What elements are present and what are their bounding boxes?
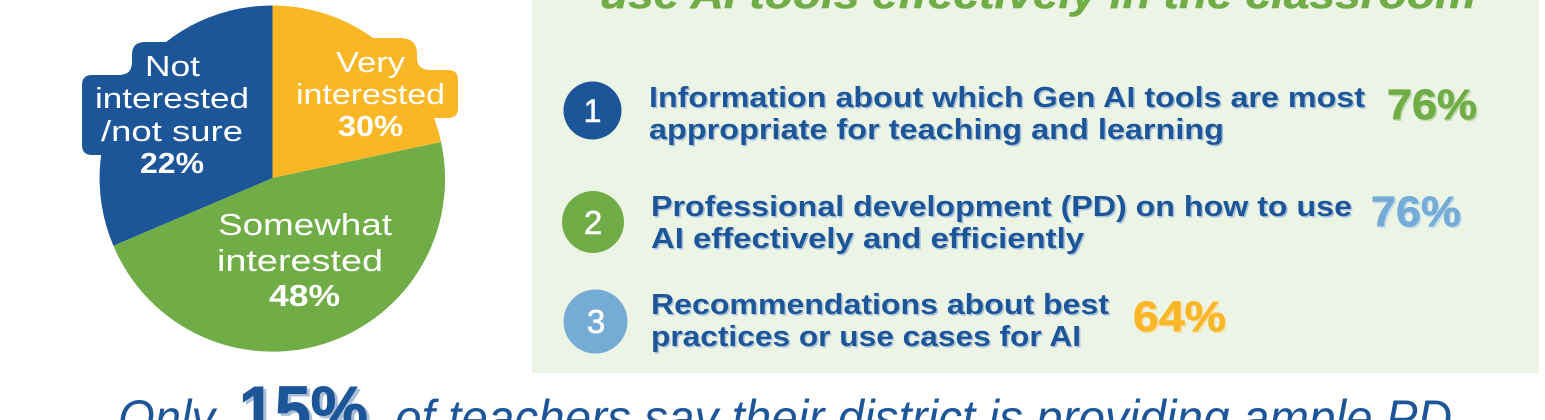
pie slice: not interested or not sure: [82, 5, 272, 246]
item 3: [564, 289, 1226, 354]
item 2 text: [651, 191, 1352, 255]
icon: number 2 badge: [562, 191, 624, 253]
label: not interested 22%: /not sure: [101, 116, 243, 148]
label: very interested 30%: Very: [336, 47, 406, 79]
item 3 text: [651, 289, 1109, 353]
label: very interested 30%: interested: [296, 79, 445, 111]
icon: number 1 badge: [564, 82, 622, 140]
bottom statement: [118, 373, 1452, 420]
item 3 percentage: 64%: [1133, 293, 1226, 341]
icon: number 3 badge: 3: [587, 303, 605, 340]
pie slice: very interested: [272, 6, 458, 178]
item 3 text: practices or use cases for AI: [651, 321, 1081, 353]
icon: number 2 badge: 2: [584, 204, 602, 241]
label: somewhat interested 48%: 48%: [269, 278, 340, 313]
item 1: [564, 81, 1477, 146]
item 2 text: Professional development (PD) on how to use: [651, 191, 1352, 223]
label: not interested 22%: 22%: [140, 148, 204, 180]
item 2: [562, 188, 1461, 255]
pie slice: somewhat interested: [113, 142, 445, 352]
item 1 percentage: 76%: [1387, 81, 1477, 129]
item 1 text: Information about which Gen AI tools are most: [649, 82, 1365, 114]
label: somewhat interested 48%: [217, 207, 392, 313]
label: very interested 30%: 30%: [338, 111, 403, 143]
pie chart: interest in AI: [82, 5, 458, 352]
label: somewhat interested 48%: interested: [217, 243, 383, 278]
icon: number 1 badge: 1: [584, 93, 601, 129]
label: not interested 22%: interested: [95, 83, 249, 115]
label: not interested 22%: Not: [145, 51, 200, 83]
label: very interested 30%: [296, 47, 445, 143]
label: somewhat interested 48%: Somewhat: [218, 207, 392, 242]
item 1 text: [649, 82, 1365, 146]
label: not interested 22%: [95, 51, 249, 180]
icon: number 3 badge: [564, 290, 628, 354]
item 3 text: Recommendations about best: [651, 289, 1109, 321]
item 2 percentage: 76%: [1371, 188, 1461, 236]
item 2 text: AI effectively and efficiently: [651, 223, 1084, 255]
item 1 text: appropriate for teaching and learning: [649, 114, 1224, 146]
